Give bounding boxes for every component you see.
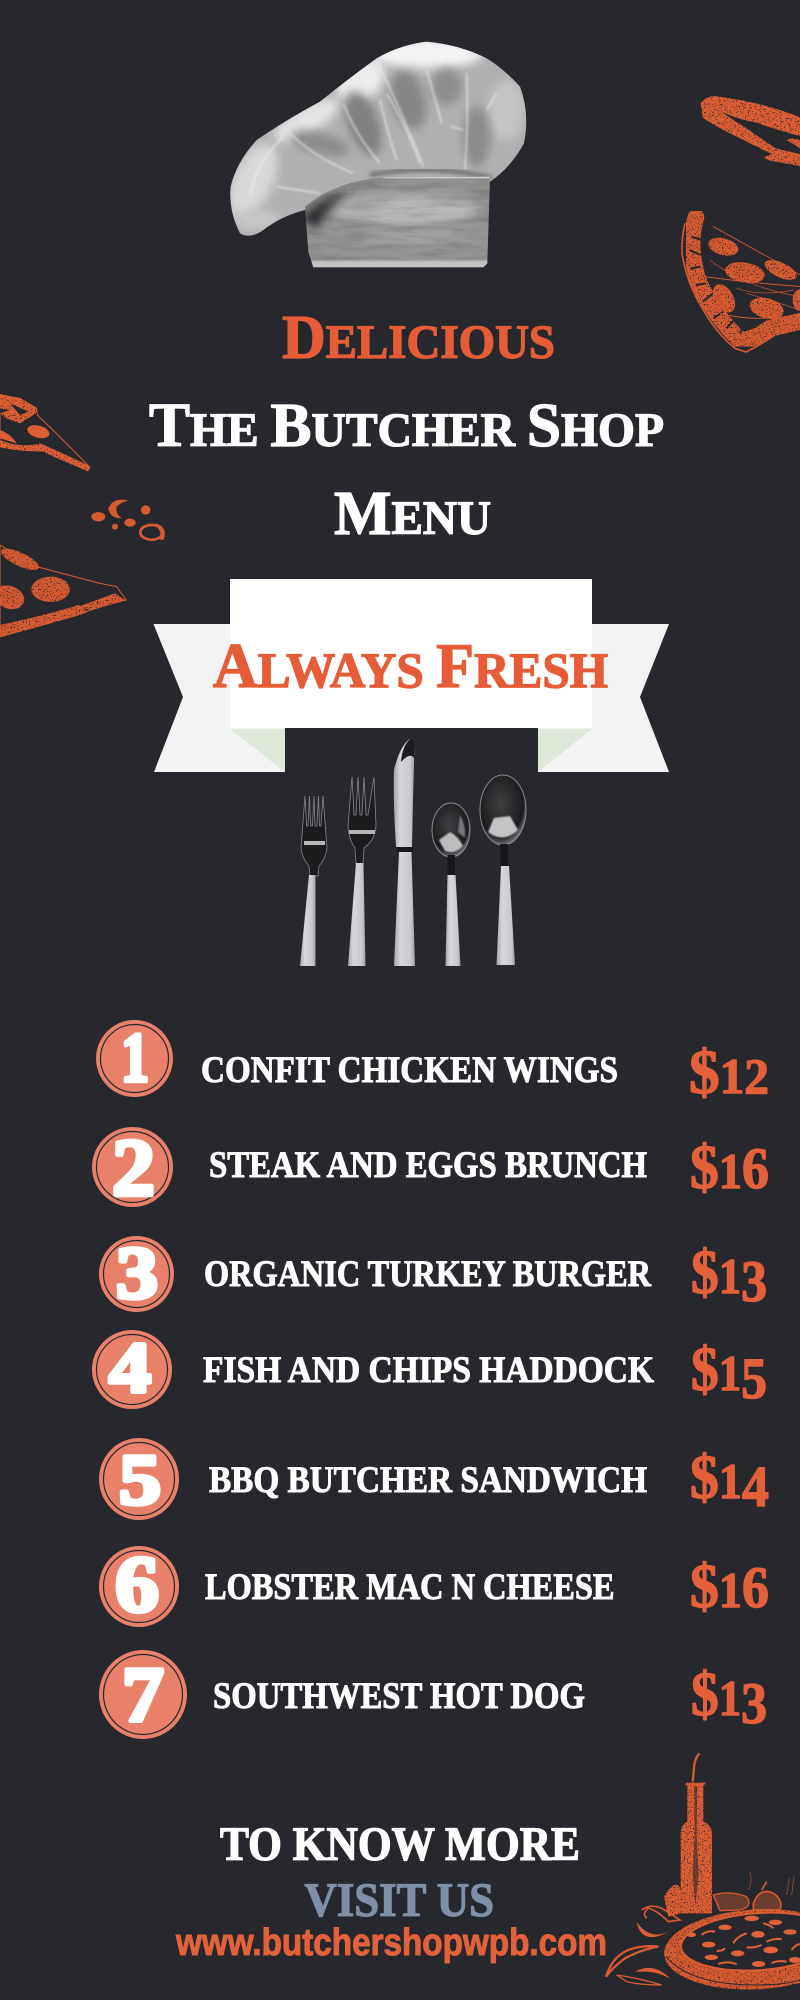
dinner fork bbox=[348, 777, 376, 966]
pizza bbox=[662, 1905, 800, 1994]
item name 3: ORGANIC TURKEY BURGER bbox=[204, 1254, 652, 1295]
price 2: $16 bbox=[690, 1134, 769, 1202]
menu item 6: 6 bbox=[115, 1541, 159, 1629]
pizza slice lower bbox=[682, 217, 800, 352]
heading: Delicious: DELICIOUS bbox=[282, 304, 555, 372]
menu item 4: 4 bbox=[109, 1328, 151, 1408]
menu item 7 bbox=[99, 1650, 767, 1739]
item name 6: LOBSTER MAC N CHEESE bbox=[205, 1567, 614, 1608]
price 4: 5 bbox=[741, 1346, 767, 1411]
price 6: $16 bbox=[690, 1553, 769, 1621]
menu item 3 bbox=[99, 1233, 767, 1315]
pizza slice top left bbox=[0, 394, 90, 471]
ribbon folds bbox=[230, 729, 592, 772]
number badge 6 bbox=[99, 1546, 179, 1627]
number badge 5 bbox=[99, 1438, 179, 1520]
herbs and vegetables bbox=[606, 1872, 794, 1985]
icon: cutlery set bbox=[300, 738, 526, 966]
item name 1: CONFIT CHICKEN WINGS bbox=[201, 1050, 618, 1091]
menu item 6 bbox=[99, 1541, 769, 1629]
illustration: oil bottle and pizza bbox=[606, 1753, 800, 1994]
number badge 1 bbox=[96, 1020, 173, 1097]
illustration: pizza slices left bbox=[0, 394, 165, 637]
small spoon bbox=[432, 803, 470, 966]
bottle bbox=[681, 1753, 712, 1913]
price 3: $1 bbox=[691, 1239, 744, 1307]
ribbon centre panel bbox=[230, 579, 592, 728]
menu item 5: 5 bbox=[119, 1440, 161, 1520]
item name 4: FISH AND CHIPS HADDOCK bbox=[203, 1350, 654, 1391]
price 5: 4 bbox=[742, 1454, 769, 1519]
hat puff bbox=[230, 42, 526, 236]
illustration: pizza slices top right bbox=[682, 96, 800, 352]
price 7: 3 bbox=[741, 1671, 767, 1736]
number badge 2 bbox=[92, 1127, 173, 1207]
pizza slice upper shadow bbox=[722, 112, 800, 154]
small fork bbox=[300, 796, 327, 966]
banner text: Always Fresh: ALWAYS FRESH bbox=[213, 631, 608, 701]
price 4: $1 bbox=[691, 1336, 744, 1404]
heading: The Butcher Shop: THE BUTCHER SHOP bbox=[149, 392, 664, 460]
footer text: To know more: TO KNOW MORE bbox=[220, 1818, 580, 1871]
footer text: website: www.butchershopwpb.com bbox=[175, 1922, 607, 1964]
price 7: $1 bbox=[691, 1661, 744, 1729]
pizza crumbs bbox=[91, 500, 165, 540]
banner ribbon bbox=[154, 579, 669, 772]
knife bbox=[394, 738, 415, 966]
price 3: 3 bbox=[741, 1249, 767, 1314]
footer text: Visit us: VISIT US bbox=[304, 1874, 494, 1927]
large spoon bbox=[480, 775, 526, 965]
ribbon tails bbox=[154, 624, 669, 772]
pizza slice upper bbox=[701, 96, 800, 166]
number badge 7 bbox=[99, 1650, 187, 1739]
menu item 5 bbox=[99, 1438, 769, 1520]
menu item 1 bbox=[96, 1020, 769, 1107]
item name 5: BBQ BUTCHER SANDWICH bbox=[209, 1460, 647, 1501]
hat band bbox=[305, 176, 490, 268]
price 5: $1 bbox=[690, 1444, 744, 1512]
number badge 3 bbox=[99, 1236, 174, 1312]
item name 7: SOUTHWEST HOT DOG bbox=[213, 1676, 585, 1717]
price 1: $12 bbox=[689, 1039, 769, 1107]
item name 2: STEAK AND EGGS BRUNCH bbox=[209, 1145, 647, 1186]
number badge 4 bbox=[92, 1330, 172, 1409]
menu item 2: 2 bbox=[112, 1122, 155, 1213]
menu item 3: 3 bbox=[116, 1233, 158, 1315]
menu item 7: 7 bbox=[122, 1651, 164, 1738]
menu item 1: 1 bbox=[121, 1020, 149, 1097]
menu item 2 bbox=[92, 1122, 769, 1213]
menu item 4 bbox=[92, 1328, 767, 1411]
pizza slice bottom left bbox=[0, 545, 126, 637]
icon: chef hat bbox=[230, 42, 526, 268]
heading: Menu: MENU bbox=[334, 480, 491, 548]
